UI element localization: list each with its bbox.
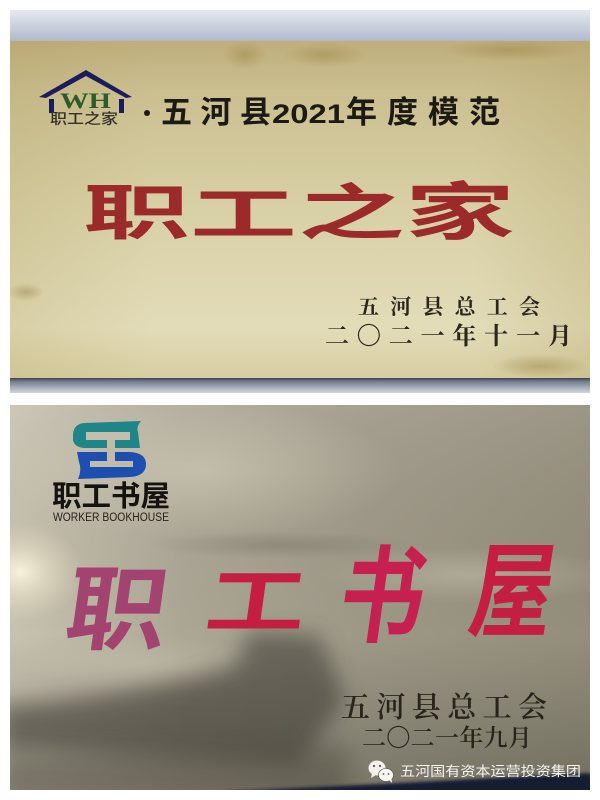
main title: workers' bookhouse: 书	[332, 540, 433, 657]
plaque bottom edge	[10, 378, 590, 393]
main title: workers' bookhouse: 工	[201, 562, 312, 643]
brass plaque surface	[8, 39, 590, 378]
watermark: WeChat account	[368, 760, 581, 783]
heading: model designation: 年度模范	[346, 87, 500, 132]
icon: house pillars	[49, 99, 124, 113]
main title: workers' bookhouse: 职	[59, 559, 175, 662]
main title: workers' bookhouse: 屋	[463, 535, 563, 650]
heading: model designation: 2021	[272, 99, 345, 129]
issue date: 二〇二一年十一月	[325, 316, 572, 351]
icon: blue lower book mark	[77, 452, 146, 479]
photo: model workers' home plaque	[8, 10, 590, 393]
main title: workers' bookhouse	[66, 544, 554, 650]
steel plaque surface	[0, 400, 600, 800]
logo: WH workers' home	[39, 70, 132, 129]
main title: workers' home	[86, 180, 512, 240]
main title: workers' home: 工	[190, 183, 297, 247]
main title: workers' home: 职	[83, 181, 190, 247]
logo letters: WH	[60, 88, 111, 113]
photo: workers' bookhouse plaque	[0, 400, 600, 800]
account name: 五河国有资本运营投资集团	[400, 764, 581, 779]
plaque top wall band	[10, 10, 590, 41]
heading: model designation: 五河县	[161, 87, 271, 132]
icon: WeChat bubbles	[368, 760, 394, 783]
issuer: county federation of trade unions: 五河县总工会	[358, 291, 540, 321]
logo caption: 职工之家	[50, 108, 119, 129]
footer shadow	[231, 771, 590, 790]
icon: house roof	[39, 70, 132, 98]
logo name: 职工书屋	[52, 473, 170, 515]
logo: worker bookhouse	[52, 421, 170, 524]
icon: teal upper book mark	[73, 421, 141, 448]
issuer: county federation of trade unions: 五河县总工会	[341, 685, 547, 726]
issue date: 二〇二一年九月	[362, 718, 532, 753]
main title: workers' home: 之	[298, 181, 405, 247]
heading: model designation	[144, 96, 500, 126]
logo English name: WORKER BOOKHOUSE	[53, 512, 169, 524]
main title: workers' home: 家	[405, 177, 515, 247]
